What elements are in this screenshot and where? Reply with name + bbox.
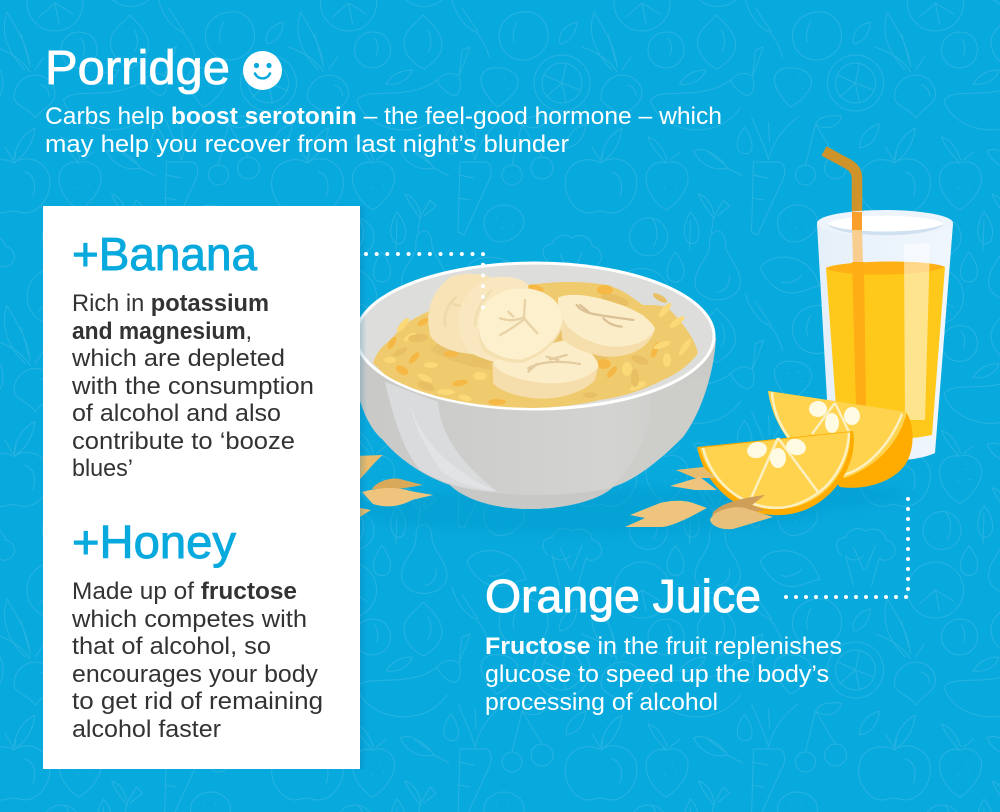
text: banana description: contribute to ‘booze: [72, 428, 295, 455]
ground shadow: [355, 486, 825, 534]
banana slice: second: [458, 277, 528, 367]
text: honey description: which competes with: [71, 606, 307, 633]
connector: banana dotted line: [366, 254, 483, 312]
connector: orange juice dotted line: [786, 498, 908, 597]
intro text: [45, 103, 722, 158]
panel shadow: [360, 206, 367, 769]
text: banana description: of alcohol and also: [72, 400, 281, 427]
heading: Orange Juice: Orange Juice: [485, 570, 761, 622]
oats left of bowl: [355, 455, 433, 520]
panel: banana and honey: [43, 206, 360, 769]
text: banana description: which are depleted: [71, 345, 285, 372]
text: honey description: [71, 578, 323, 743]
text: honey description: encourages your body: [72, 661, 318, 688]
banana slice: right: [559, 298, 655, 357]
glass mouth: [817, 210, 953, 236]
glass highlight: [904, 243, 930, 420]
text: banana description: blues’: [72, 455, 133, 482]
text: orange juice description: glucose to speed up the body’s: [485, 661, 829, 688]
banana slice: left: [428, 274, 507, 360]
straw in glass: [852, 212, 862, 230]
illustration: glass of orange juice: [725, 151, 953, 509]
text: banana description: and magnesium,: [72, 318, 252, 345]
oats right of bowl: [625, 467, 773, 529]
heading: +Honey: +Honey: [72, 516, 236, 568]
intro text: may help you recover from last night’s blunder: [45, 131, 569, 158]
text: banana description: Rich in potassium: [72, 290, 269, 317]
banana slice: bottom: [492, 340, 598, 399]
text: banana description: [71, 290, 314, 482]
text: orange juice description: [485, 633, 842, 716]
glass body: [817, 224, 953, 461]
porridge: [373, 282, 698, 408]
icon: smiley face: [243, 51, 282, 90]
banana slice: front: [478, 288, 562, 363]
illustration: orange wedges: [697, 391, 913, 515]
bowl rim: [356, 263, 714, 409]
juice: [826, 262, 945, 439]
wedge: back: [768, 391, 913, 488]
bowl body: [352, 338, 716, 509]
wedge: front: [697, 431, 854, 515]
text: honey description: to get rid of remaining: [72, 688, 323, 715]
shadow under orange slices: [725, 481, 905, 509]
text: banana description: with the consumption: [71, 373, 314, 400]
text: honey description: that of alcohol, so: [72, 633, 271, 660]
text: orange juice description: Fructose in the fruit replenishes: [485, 633, 842, 660]
text: orange juice description: processing of alcohol: [485, 689, 718, 716]
straw top: [824, 151, 857, 214]
text: honey description: alcohol faster: [72, 716, 221, 743]
text: honey description: Made up of fructose: [72, 578, 297, 605]
title: Porridge: Porridge: [45, 42, 230, 95]
heading: +Banana: +Banana: [72, 228, 257, 280]
illustration: porridge bowl: [352, 263, 716, 509]
intro text: Carbs help boost serotonin – the feel-good hormone – which: [45, 103, 722, 130]
banana slices: [428, 274, 655, 399]
